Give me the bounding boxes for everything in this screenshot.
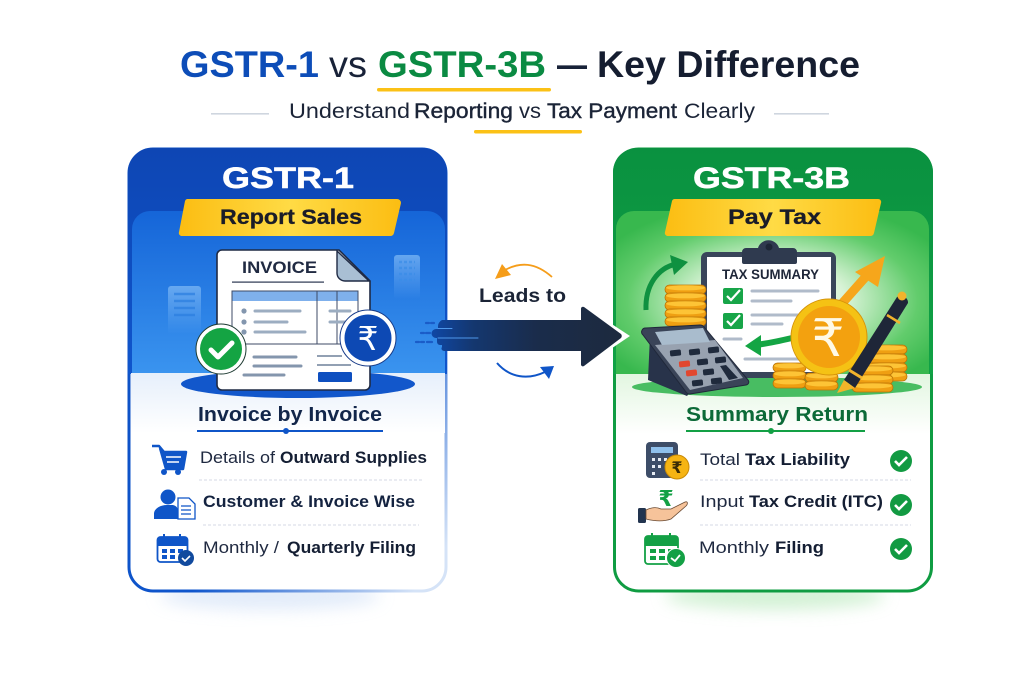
glow: under left panel: [160, 582, 380, 610]
row: monthly filing: Filing: [775, 539, 824, 557]
row: total tax liability: Total: [700, 451, 740, 469]
icon: rupee badge: [340, 310, 396, 366]
icon: calculator small: ₹: [671, 458, 683, 477]
panel: GSTR-1: [128, 148, 447, 591]
subtitle: Understand: [289, 100, 410, 123]
clipboard label: TAX SUMMARY: [722, 267, 819, 282]
icon: faded document left: [168, 286, 201, 334]
subtitle: Reporting: [414, 100, 513, 123]
arrow: curved green: [646, 255, 688, 310]
icon: rupee badge: ₹: [358, 319, 378, 358]
icon: calendar: [158, 534, 194, 566]
row: monthly filing: [699, 539, 824, 557]
title: GSTR-1: [180, 44, 319, 85]
icon: calculator: [642, 325, 749, 396]
row: quarterly filing: [203, 539, 416, 557]
icon: left coins: [665, 285, 706, 326]
row: quarterly filing: Quarterly Filing: [287, 539, 416, 557]
icon: check 3: [890, 538, 912, 560]
heading: Invoice by Invoice: Invoice by Invoice: [198, 404, 382, 426]
row: customer and invoice wise: Customer & Invoice Wise: [203, 493, 415, 511]
row: outward supplies: Outward Supplies: [280, 449, 427, 467]
row: input tax credit: [700, 493, 883, 511]
invoice table: [232, 291, 358, 344]
icon: clipboard: [701, 240, 836, 378]
icon: check 2: [890, 494, 912, 516]
title: —: [557, 44, 587, 85]
icon: hand with rupee: ₹: [658, 487, 674, 512]
heading underline: [197, 428, 383, 434]
icon: rupee coin: [791, 299, 867, 375]
icon: customer and invoice: [154, 490, 195, 519]
arrow: leads to main: [416, 302, 630, 371]
invoice label: INVOICE: [242, 258, 317, 277]
arrow: orange growth: [838, 256, 885, 308]
row: total tax liability: Tax Liability: [745, 451, 851, 469]
label: Leads to: Leads to: [479, 286, 566, 307]
title: GSTR-3B: [378, 44, 546, 85]
icon: rupee coin: ₹: [811, 309, 845, 369]
icon: faded building right: [394, 255, 420, 299]
arrow: green back arrow: [745, 335, 792, 356]
subtitle underline: [474, 130, 582, 134]
row: quarterly filing: Monthly /: [203, 539, 279, 557]
glow: under right panel: [665, 582, 885, 610]
heading underline: [686, 428, 865, 434]
platform ellipse: [632, 377, 922, 397]
badge: Report Sales: Report Sales: [220, 206, 362, 229]
icon: green check badge: [196, 324, 246, 374]
arrow: orange curved: [495, 264, 552, 279]
subtitle: Tax Payment: [547, 100, 677, 123]
heading: GSTR-1: GSTR-1: [222, 162, 354, 195]
badge: Report Sales: [179, 199, 401, 236]
row: total tax liability: [700, 451, 851, 469]
heading: Summary Return: Summary Return: [686, 404, 868, 426]
icon: hand with rupee: [638, 487, 687, 523]
badge: Pay Tax: Pay Tax: [728, 206, 821, 229]
subtitle: [289, 100, 756, 123]
row: outward supplies: Details of: [200, 449, 275, 467]
icon: invoice document: [217, 250, 370, 390]
row: input tax credit: Input: [700, 493, 744, 511]
panel: GSTR-3B: [613, 148, 933, 591]
heading: GSTR-3B: GSTR-3B: [693, 162, 850, 195]
arrow: blue curved: [497, 363, 554, 379]
icon: pen: [837, 292, 908, 393]
title: [180, 44, 860, 85]
row: outward supplies: [200, 449, 427, 467]
badge: Pay Tax: [665, 199, 881, 236]
row: monthly filing: Monthly: [699, 539, 770, 557]
icon: calculator small: [646, 442, 689, 479]
subtitle: Clearly: [684, 100, 756, 123]
title: vs: [329, 44, 367, 85]
icon: calendar green: [645, 533, 686, 568]
title: Key Difference: [597, 44, 860, 85]
icon: front coin stacks: [773, 345, 907, 392]
platform ellipse: [181, 370, 415, 398]
title underline: [377, 88, 551, 92]
subtitle: vs: [519, 100, 541, 123]
icon: check 1: [890, 450, 912, 472]
row: input tax credit: Tax Credit (ITC): [749, 493, 883, 511]
icon: shopping cart: [152, 446, 186, 475]
